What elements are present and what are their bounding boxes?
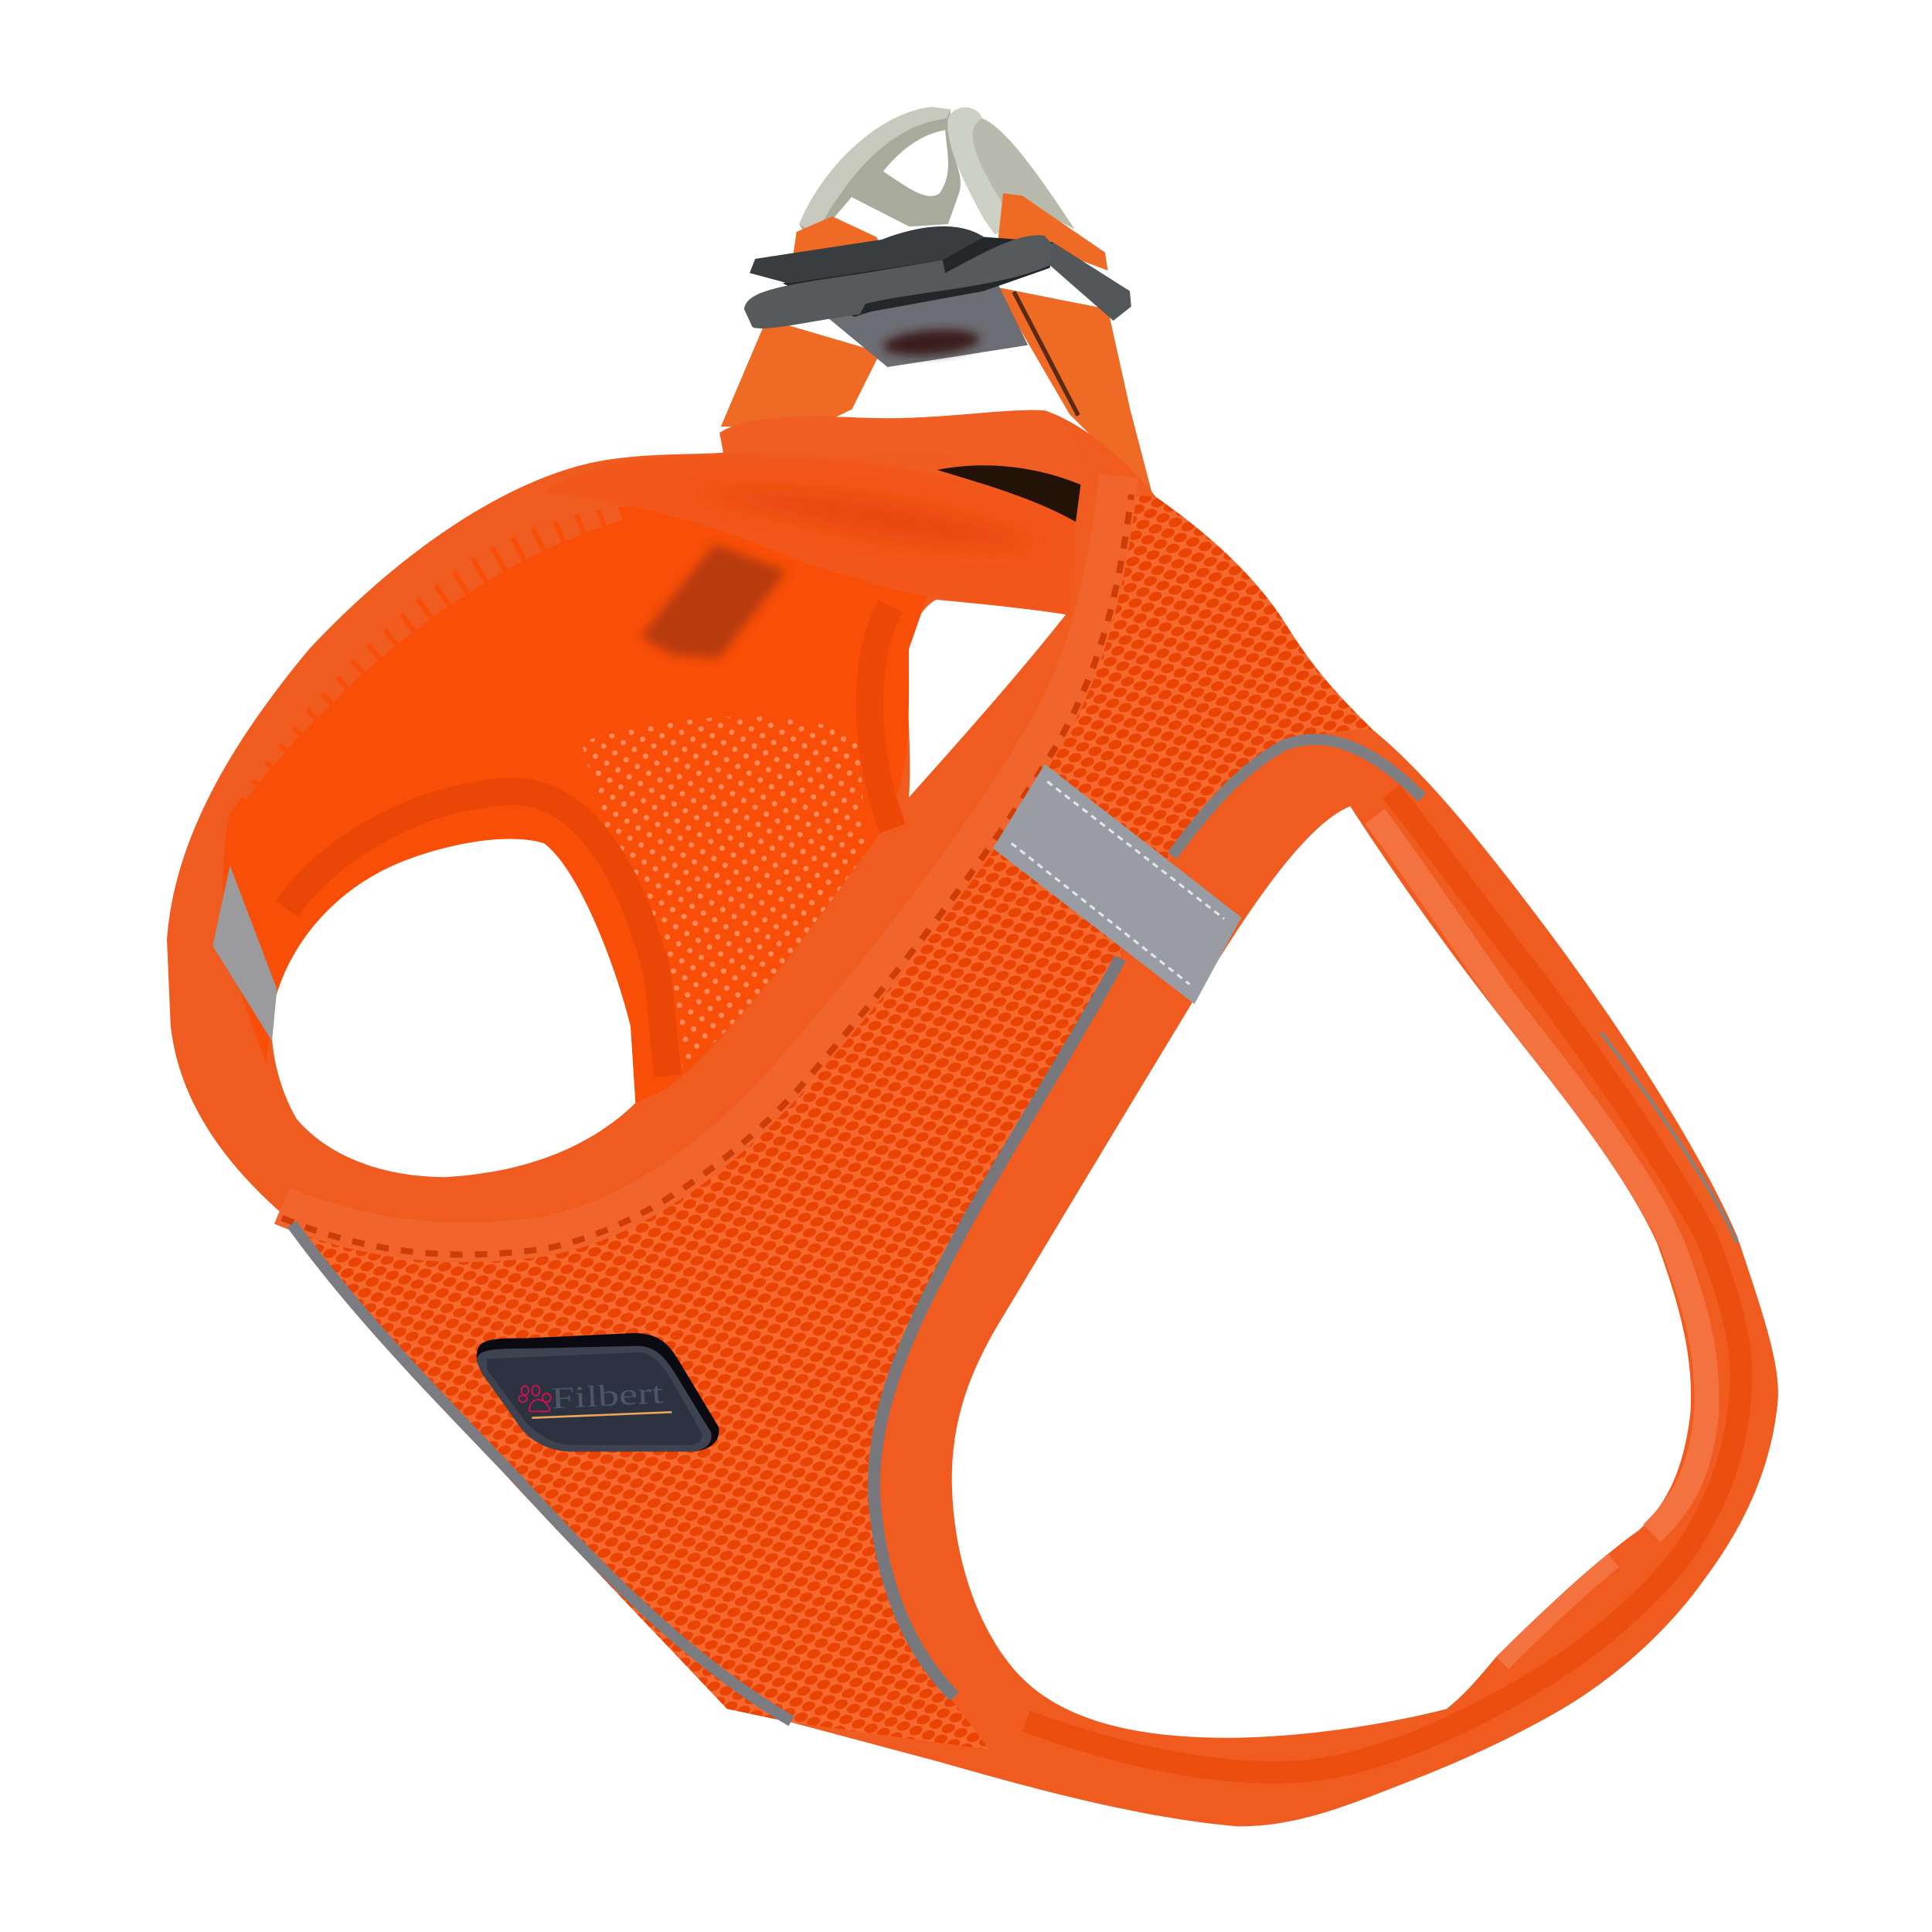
flap rim shaded area (692, 491, 1039, 546)
strap: dark slit between layers (1014, 292, 1078, 416)
strap: left neck strap (721, 319, 880, 427)
dark patch on lining (641, 544, 787, 658)
buckle and D-rings (744, 107, 1131, 367)
reflective piping: outer right edge (1601, 1032, 1737, 1243)
neck flap (719, 410, 1081, 488)
front mesh panel (294, 495, 1372, 1750)
buckle right bar (1050, 242, 1131, 321)
reflective tab (993, 764, 1241, 1004)
badge inner panel (487, 1352, 702, 1445)
seam shadow stitches (282, 495, 1131, 1254)
inner seam: vertical (869, 606, 893, 828)
strap end at right ring (998, 193, 1107, 270)
badge shadow (477, 1333, 719, 1451)
inner seam: top edge (235, 507, 618, 791)
inner seam: leg opening (287, 791, 668, 1076)
harness body (167, 287, 1778, 1826)
right binding: light patch at lower opening (1502, 1560, 1614, 1663)
raised seam band (282, 476, 1119, 1242)
right binding: light band along opening (1375, 816, 1707, 1533)
buckle button recess (883, 326, 981, 359)
badge face (477, 1346, 712, 1451)
dark gap under the flap (937, 465, 1080, 522)
buckle bottom plate (827, 284, 1028, 367)
strap: right neck strap (995, 287, 1152, 495)
metal ring: left light rim (799, 107, 951, 234)
buckle front bar (744, 235, 1053, 328)
metal ring: right light strip (947, 107, 1014, 234)
reflective piping: inside of right opening (874, 958, 1121, 1696)
brand badge (477, 1333, 719, 1451)
buckle top piece (750, 226, 984, 284)
reflective piping: top of right opening (1172, 740, 1422, 855)
reflective piping: lower edge (292, 1224, 791, 1721)
paw logo (519, 1386, 551, 1412)
buckle dark underlay (783, 237, 1053, 317)
inner mesh panel (581, 716, 866, 1070)
brand name: Filbert (550, 1376, 664, 1416)
right binding: dark middle stripe (1026, 791, 1741, 1772)
neck flap rim (544, 455, 1076, 614)
inner lining (223, 506, 927, 1103)
metal ring: left (799, 107, 961, 242)
strap end at left ring (791, 216, 893, 270)
grey felt tag (213, 866, 277, 1041)
amber underline (532, 1412, 672, 1418)
body silhouette with openings (167, 410, 1778, 1826)
metal ring: right (947, 107, 1075, 234)
